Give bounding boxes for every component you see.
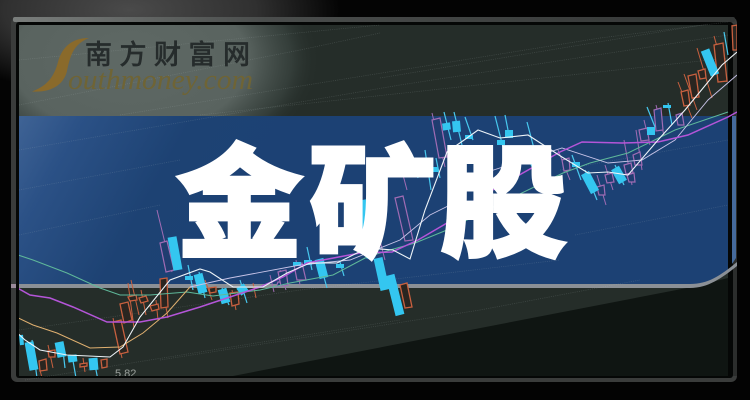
logo Chinese name: 南方财富网 <box>85 40 250 70</box>
moving average: green <box>12 112 728 296</box>
moving average: white <box>12 52 737 357</box>
blue frame edge right <box>732 116 736 264</box>
logo: Southmoney <box>32 38 253 96</box>
wicks on blue area <box>157 105 664 292</box>
band lower highlight strip <box>19 262 737 288</box>
blue band <box>19 116 728 285</box>
strip edge on left frame <box>11 284 16 288</box>
cyan filled candles <box>13 50 715 370</box>
moving average: purple <box>12 112 737 322</box>
moving average: tan <box>12 287 190 348</box>
axis price label: 5.82 <box>115 368 136 380</box>
title character: mine: 矿 <box>309 137 436 273</box>
title character: gold: 金 <box>176 137 303 273</box>
logo domain: outhmoney.com <box>68 65 253 96</box>
logo swoosh S <box>32 38 89 92</box>
hollow candles on blue area <box>160 108 684 287</box>
title character: stock: 股 <box>440 137 567 273</box>
dark wedge lower right <box>233 278 728 376</box>
title <box>176 137 567 273</box>
top-left background glow <box>0 0 400 100</box>
